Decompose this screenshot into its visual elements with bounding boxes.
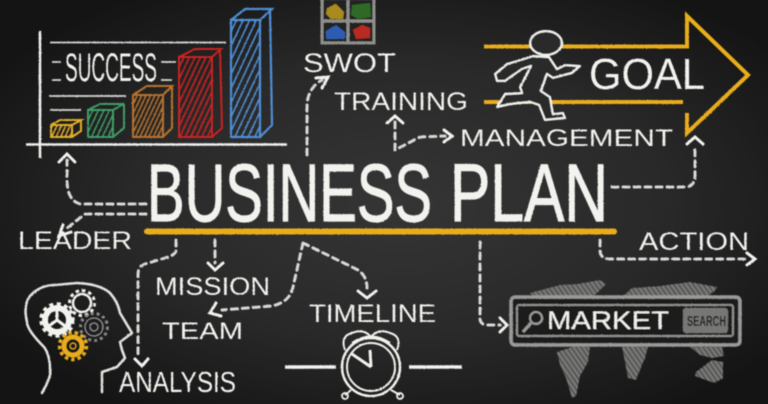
search button (683, 308, 728, 333)
TIMELINE label: TIMELINE (309, 300, 436, 328)
arrow: to SWOT (307, 77, 328, 155)
arrow outline (484, 16, 748, 133)
ANALYSIS label: ANALYSIS (119, 367, 236, 399)
arrow: to action (600, 240, 755, 265)
arrow: to mission (208, 240, 223, 270)
red bar (179, 49, 222, 137)
grey gear (80, 314, 108, 340)
chart axes (26, 31, 287, 158)
SWOT label: SWOT (303, 48, 396, 78)
icon: magnifier (523, 312, 542, 332)
yellow gear (60, 332, 86, 360)
arrow: to chart (59, 154, 146, 204)
world map (530, 280, 724, 398)
small white gear (70, 290, 94, 316)
white gear (41, 304, 73, 336)
goal arrow (484, 16, 748, 133)
arrow: to analysis (135, 240, 176, 366)
MARKET label: MARKET (547, 307, 669, 335)
green bar (88, 104, 124, 137)
yellow bar (51, 120, 81, 137)
dashed arrows (59, 77, 755, 366)
icon: alarm clock (285, 331, 462, 399)
title: BUSINESS PLAN: BUSINESS (147, 148, 432, 239)
TRAINING label: TRAINING (334, 88, 468, 116)
title underline (144, 228, 617, 234)
icon: head with gears (26, 283, 132, 393)
head outline (26, 283, 132, 393)
title: BUSINESS PLAN: PLAN (450, 148, 608, 239)
search box (511, 297, 740, 345)
GOAL label: GOAL (589, 50, 705, 99)
arrow: to team (210, 243, 303, 316)
arrow: to market (480, 242, 507, 332)
bar chart: success (26, 9, 287, 158)
icon: SWOT grid (322, 0, 374, 43)
orange bar (133, 86, 172, 137)
MANAGEMENT label: MANAGEMENT (460, 125, 673, 152)
arrow: to training and management (387, 116, 452, 150)
bar chart: success: SUCCESS (65, 46, 157, 90)
search button: SEARCH (687, 313, 726, 330)
MISSION label: MISSION (155, 273, 270, 301)
LEADER label: LEADER (18, 227, 132, 255)
arrow: to timeline (303, 243, 376, 298)
TEAM label: TEAM (162, 318, 243, 345)
arrow: to goal (612, 137, 703, 187)
arrow: to leader (59, 214, 146, 236)
ACTION label: ACTION (639, 228, 749, 256)
blue bar (231, 9, 272, 137)
runner figure (495, 31, 580, 120)
